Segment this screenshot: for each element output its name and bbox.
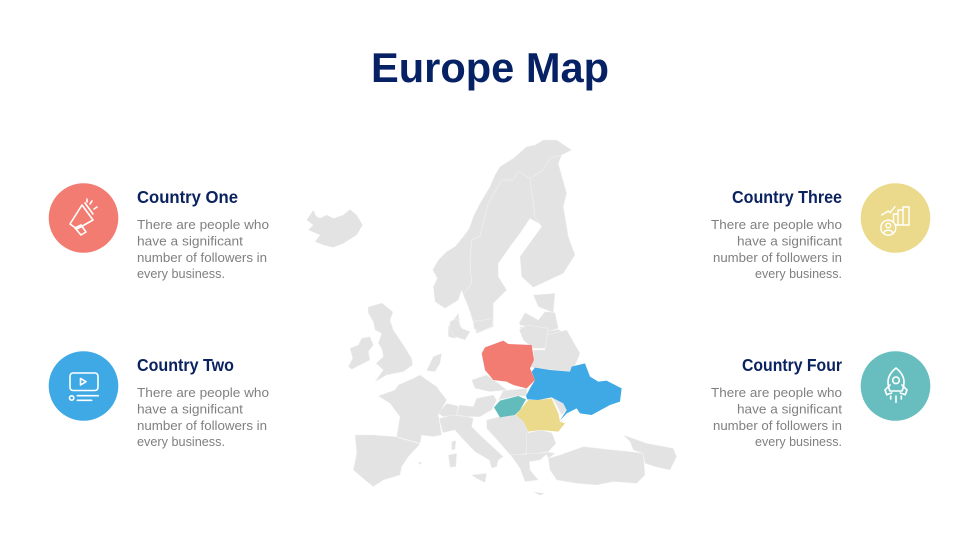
description: have a significant (137, 402, 243, 416)
heading: Country Two (137, 355, 234, 375)
icon: megaphone (49, 183, 118, 253)
description (711, 385, 842, 449)
panel: Country Three (711, 183, 930, 281)
description: have a significant (737, 402, 842, 416)
panel: Country Two (49, 351, 269, 449)
heading: Country Four (742, 355, 842, 375)
heading: Country Three (732, 187, 842, 207)
Hungary (494, 396, 526, 417)
description: There are people who (137, 217, 269, 232)
Ukraine (526, 363, 622, 421)
description: number of followers in (137, 418, 267, 433)
description: There are people who (137, 385, 269, 400)
icon: video (49, 351, 118, 421)
description: number of followers in (137, 250, 267, 265)
description: number of followers in (713, 418, 842, 433)
Poland (482, 341, 535, 388)
Scandinavia and Baltics (433, 140, 575, 343)
icon: rocket (861, 351, 930, 421)
panel: Country One (49, 183, 269, 281)
map of Europe (307, 140, 677, 495)
title: Europe Map (371, 44, 609, 91)
description: have a significant (737, 234, 842, 248)
icon: growth chart with person (861, 183, 930, 253)
heading: Country One (137, 187, 238, 207)
description: There are people who (711, 385, 842, 400)
description (711, 217, 842, 281)
Western and Central Europe (348, 303, 503, 487)
description: number of followers in (713, 250, 842, 265)
description: every business. (755, 266, 842, 281)
description: every business. (137, 266, 225, 281)
description: every business. (755, 434, 842, 449)
panel: Country Four (711, 351, 930, 449)
description (137, 385, 269, 449)
description (137, 217, 269, 281)
description: There are people who (711, 217, 842, 232)
Eastern Europe and Turkey (472, 325, 677, 495)
highlighted countries (482, 341, 622, 432)
Iceland (307, 209, 363, 247)
Romania (516, 398, 565, 432)
description: have a significant (137, 234, 243, 248)
description: every business. (137, 434, 225, 449)
